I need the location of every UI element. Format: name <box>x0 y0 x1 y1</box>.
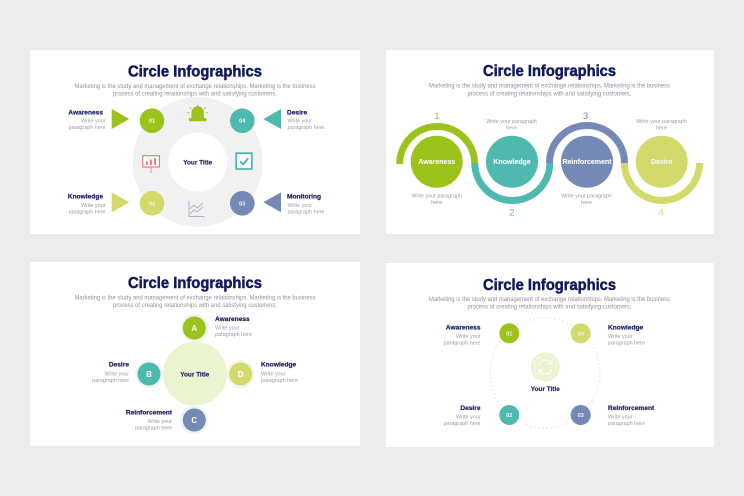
label: monitoring: paragraph here <box>288 210 324 216</box>
panel: wave process <box>386 50 714 234</box>
label: knowledge <box>68 194 106 216</box>
subtitle: process of creating relationships with and satisfying customers. <box>113 91 277 97</box>
label: knowledge: Knowledge <box>261 362 297 369</box>
label: reinforcement: Reinforcement <box>126 410 173 416</box>
label: desire: Write your <box>456 414 481 420</box>
subtitle: Marketing is the study and management of exchange relationships. Marketing is the business <box>74 295 316 301</box>
subtitle <box>74 295 316 309</box>
node 02 <box>499 405 519 425</box>
label: knowledge: Write your <box>81 203 106 209</box>
label: reinforcement: paragraph here <box>608 421 645 427</box>
node 03 <box>571 405 591 425</box>
label: awareness: paragraph here <box>444 341 480 347</box>
center label: Your Title <box>183 160 212 166</box>
title: Circle Infographics <box>128 275 262 292</box>
label: awareness: Write your <box>456 334 481 340</box>
node 03: 03 <box>239 201 245 207</box>
number 1: 1 <box>434 111 440 122</box>
text: step 4: here <box>656 126 667 132</box>
subtitle: Marketing is the study and management of exchange relationships. Marketing is the business <box>429 297 670 303</box>
arc 1 <box>400 127 475 164</box>
text: step 1: here <box>431 200 442 206</box>
subtitle <box>429 84 670 97</box>
number 3: 3 <box>583 111 588 122</box>
circle: awareness: Awareness <box>418 159 455 166</box>
label: reinforcement: Reinforcement <box>608 405 655 412</box>
label: knowledge <box>261 362 298 384</box>
node C <box>180 406 208 434</box>
label: awareness <box>444 325 481 347</box>
label: reinforcement: Write your <box>148 419 172 425</box>
node 01: 01 <box>149 119 155 125</box>
arrow: awareness <box>112 109 129 129</box>
subtitle: process of creating relationships with and satisfying customers. <box>113 303 277 309</box>
label: awareness: Awareness <box>215 316 250 323</box>
node 01 <box>499 323 519 343</box>
node 02: 02 <box>506 413 512 419</box>
subtitle <box>74 84 316 97</box>
label: awareness: Awareness <box>446 325 481 332</box>
arc 3 <box>550 126 624 163</box>
label: desire: Write your <box>288 119 312 125</box>
icon: presentation chart <box>143 156 159 173</box>
label: desire: Write your <box>105 371 129 377</box>
text: step 2: here <box>506 126 517 132</box>
title: Circle Infographics <box>483 63 616 80</box>
icon: siren <box>187 104 208 121</box>
node 04: 04 <box>239 119 246 125</box>
label: knowledge: paragraph here <box>69 210 106 216</box>
label: knowledge: paragraph here <box>608 341 645 347</box>
text: step 3: Write your paragraph <box>561 193 612 199</box>
text: step 3 <box>561 193 612 206</box>
number 4: 4 <box>658 208 664 218</box>
panel: dotted ring <box>386 263 714 447</box>
center icon: cycle <box>531 352 560 382</box>
label: desire: Desire <box>109 362 129 369</box>
label: reinforcement: paragraph here <box>135 426 172 432</box>
node C: C <box>191 416 197 425</box>
node 04 <box>230 108 255 133</box>
label: knowledge: Write your <box>261 371 286 377</box>
label: awareness: Write your <box>215 326 240 332</box>
text: step 2: Write your paragraph <box>486 119 537 125</box>
title: Circle Infographics <box>483 277 616 294</box>
text: step 2 <box>486 119 537 132</box>
node B: B <box>146 370 152 379</box>
node A <box>180 314 208 342</box>
node 02: 02 <box>149 201 155 207</box>
circle: desire: Desire <box>651 159 673 166</box>
text: step 3: here <box>581 200 592 206</box>
panel: petal diagram <box>30 262 360 446</box>
label: awareness: Write your <box>81 119 106 125</box>
text: step 1 <box>411 193 462 206</box>
circle: reinforcement: Reinforcement <box>562 159 612 166</box>
circle: awareness <box>411 136 463 188</box>
subtitle <box>429 297 670 311</box>
label: desire: Desire <box>287 109 307 116</box>
label: reinforcement <box>608 405 655 427</box>
node 04 <box>571 323 591 343</box>
node 01 <box>140 108 164 133</box>
arrow: desire <box>263 109 281 129</box>
number 2: 2 <box>509 208 515 218</box>
label: awareness <box>68 109 106 131</box>
label: desire: paragraph here <box>444 421 480 427</box>
subtitle: process of creating relationships with and satisfying customers. <box>468 91 632 97</box>
label: monitoring: Monitoring <box>287 194 321 201</box>
arc 4 <box>624 163 700 200</box>
text: step 4 <box>636 119 687 132</box>
icon: check box <box>236 153 252 169</box>
label: awareness: paragraph here <box>69 125 106 131</box>
label: awareness: paragraph here <box>215 332 252 338</box>
label: knowledge: paragraph here <box>261 378 298 384</box>
arc 2 <box>475 163 550 200</box>
label: monitoring: Write your <box>288 203 312 209</box>
node D: D <box>238 370 244 379</box>
subtitle: Marketing is the study and management of exchange relationships. Marketing is the business <box>429 84 670 90</box>
label: knowledge <box>608 325 645 347</box>
label: desire: Desire <box>460 405 481 412</box>
node D <box>227 360 255 388</box>
label: knowledge: Knowledge <box>68 194 103 201</box>
node 04: 04 <box>578 331 585 337</box>
label: awareness: Awareness <box>68 109 103 116</box>
circle: reinforcement <box>561 136 613 188</box>
center label: Your Title <box>531 386 560 393</box>
subtitle: process of creating relationships with and satisfying customers. <box>468 305 632 311</box>
label: desire <box>92 362 129 384</box>
node 03 <box>230 191 255 216</box>
title: Circle Infographics <box>128 63 262 80</box>
grey ring <box>133 97 263 227</box>
text: step 1: Write your paragraph <box>411 193 462 199</box>
label: desire: paragraph here <box>288 125 324 131</box>
center circle <box>163 342 227 406</box>
label: monitoring <box>287 194 324 216</box>
dotted ring <box>490 318 600 428</box>
label: knowledge: Knowledge <box>608 325 644 332</box>
label: desire: paragraph here <box>92 378 129 384</box>
label: awareness <box>215 316 252 338</box>
node 02 <box>140 191 164 216</box>
node A: A <box>191 324 197 333</box>
label: reinforcement: Write your <box>608 414 633 420</box>
panel: circle with icons <box>30 50 360 234</box>
text: step 4: Write your paragraph <box>636 119 687 125</box>
icon: line chart <box>189 201 204 216</box>
node 03: 03 <box>578 413 584 419</box>
label: desire <box>444 405 481 427</box>
node 01: 01 <box>506 331 512 337</box>
label: knowledge: Write your <box>608 334 633 340</box>
label: reinforcement <box>126 410 173 432</box>
arrow: monitoring <box>263 192 281 212</box>
node B <box>135 360 163 388</box>
circle: knowledge <box>486 136 538 188</box>
circle: knowledge: Knowledge <box>493 159 531 166</box>
circle: desire <box>636 136 688 188</box>
subtitle: Marketing is the study and management of exchange relationships. Marketing is the business <box>74 84 316 90</box>
label: desire <box>287 109 324 131</box>
arrow: knowledge <box>112 192 129 212</box>
center circle: Your Title <box>180 371 209 378</box>
